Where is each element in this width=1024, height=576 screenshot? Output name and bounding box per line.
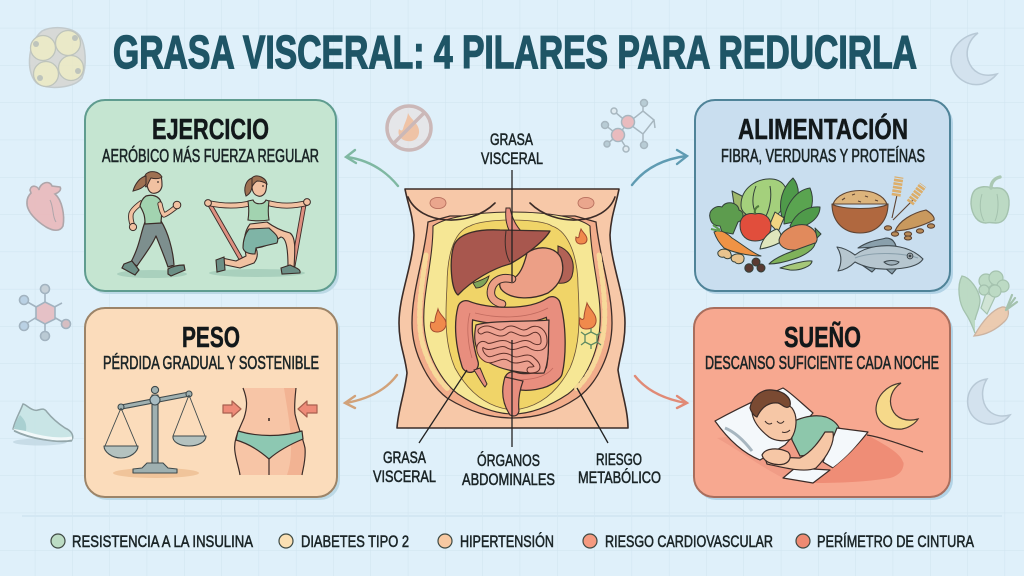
label: organos abdominales: ABDOMINALES bbox=[462, 471, 555, 489]
heading: sueno: SUEÑO bbox=[784, 320, 861, 354]
diagram: abdomen cross-section bbox=[397, 189, 628, 428]
legend item: hipertension bbox=[438, 532, 554, 551]
icon: bowl and grains bbox=[832, 177, 935, 240]
label: riesgo metabolico bbox=[578, 451, 661, 487]
label: grasa visceral bottom: VISCERAL bbox=[373, 468, 436, 486]
label line: grasa visceral bottom bbox=[419, 370, 467, 443]
icon: waist with arrows bbox=[223, 388, 317, 475]
legend item: diabetes: DIABETES TIPO 2 bbox=[301, 533, 409, 551]
label: grasa visceral top bbox=[481, 131, 543, 168]
peritoneal cavity bbox=[446, 220, 579, 410]
icon: molecule top bbox=[602, 100, 655, 152]
panel: alimentacion bbox=[695, 100, 953, 294]
arrow: to alimentacion bbox=[632, 150, 687, 185]
icon: vegetables bbox=[959, 271, 1017, 336]
arrow: to sueno bbox=[635, 376, 687, 408]
icon: vegetables group bbox=[710, 178, 821, 272]
flame right bbox=[579, 303, 596, 329]
inflammation marker bbox=[581, 328, 601, 349]
icon: running shoe bbox=[13, 404, 73, 446]
heading: peso: PESO bbox=[182, 322, 240, 354]
icon: molecule left bbox=[20, 284, 70, 340]
arrow: to ejercicio bbox=[346, 150, 398, 186]
legend item: resistencia: RESISTENCIA A LA INSULINA bbox=[72, 533, 253, 551]
liver bbox=[451, 230, 550, 295]
label line: organos bbox=[511, 340, 513, 447]
abdominal wall bbox=[412, 216, 612, 418]
wall fat lobules bbox=[420, 255, 605, 390]
arrow: to peso bbox=[345, 375, 397, 408]
torso silhouette bbox=[397, 189, 628, 428]
icon: sleeping person bbox=[715, 388, 923, 483]
label: riesgo metabolico: RIESGO bbox=[596, 451, 642, 469]
legend item: diabetes bbox=[279, 533, 409, 551]
legend item: hipertension: HIPERTENSIÓN bbox=[460, 532, 554, 551]
icon: walking woman bbox=[117, 172, 187, 278]
icon: fat cells bbox=[29, 28, 85, 87]
subtitle: peso: PÉRDIDA GRADUAL Y SOSTENIBLE bbox=[103, 353, 319, 373]
legend item: riesgo cardiovascular: RIESGO CARDIOVASCULAR bbox=[605, 533, 773, 551]
flame top bbox=[576, 229, 587, 244]
icon: balance scale bbox=[104, 386, 206, 478]
icon: moon top right bbox=[951, 33, 997, 85]
label: organos abdominales bbox=[462, 451, 555, 489]
legend item: perimetro bbox=[796, 532, 974, 551]
small intestine bbox=[475, 320, 549, 373]
label: riesgo metabolico: METABÓLICO bbox=[578, 468, 661, 487]
label: organos abdominales: ÓRGANOS bbox=[477, 451, 540, 470]
subtitle: ejercicio: AERÓBICO MÁS FUERZA REGULAR bbox=[102, 145, 319, 166]
label: grasa visceral bottom bbox=[373, 449, 436, 486]
heading: alimentacion: ALIMENTACIÓN bbox=[738, 112, 908, 146]
gallbladder bbox=[473, 276, 489, 288]
icon: lunge with band bbox=[205, 176, 310, 277]
label: grasa visceral top: GRASA bbox=[490, 131, 533, 149]
label: grasa visceral bottom: GRASA bbox=[383, 449, 426, 467]
subtitle: alimentacion: FIBRA, VERDURAS Y PROTEÍNAS bbox=[721, 146, 925, 166]
appendix bbox=[474, 368, 487, 387]
legend bbox=[51, 532, 974, 551]
icon: heart bbox=[27, 183, 64, 230]
label line: grasa visceral top bbox=[511, 170, 513, 282]
icon: fish bbox=[837, 238, 923, 274]
label: grasa visceral top: VISCERAL bbox=[481, 150, 543, 168]
duodenum bbox=[491, 278, 512, 304]
legend item: riesgo cardiovascular bbox=[583, 533, 773, 551]
flame left bbox=[430, 309, 446, 332]
panel: ejercicio bbox=[85, 100, 339, 294]
visceral fat layer bbox=[424, 212, 600, 414]
legend item: perimetro: PERÍMETRO DE CINTURA bbox=[817, 532, 974, 551]
large intestine bbox=[464, 305, 557, 382]
icon: no fat burn bbox=[387, 106, 431, 150]
label line: riesgo bbox=[577, 388, 608, 443]
panel: sueno bbox=[694, 308, 953, 500]
esophagus bbox=[506, 208, 522, 236]
rectum bbox=[503, 377, 523, 416]
chest curves bbox=[408, 197, 615, 220]
heading: ejercicio: EJERCICIO bbox=[152, 114, 269, 146]
icon: bell pepper bbox=[971, 177, 1009, 223]
panel: peso bbox=[85, 308, 340, 500]
icon: moon bbox=[876, 383, 918, 429]
icon: moon lower right bbox=[968, 379, 1010, 424]
spleen bbox=[558, 246, 573, 283]
nipples bbox=[430, 197, 594, 209]
stomach bbox=[500, 248, 563, 298]
